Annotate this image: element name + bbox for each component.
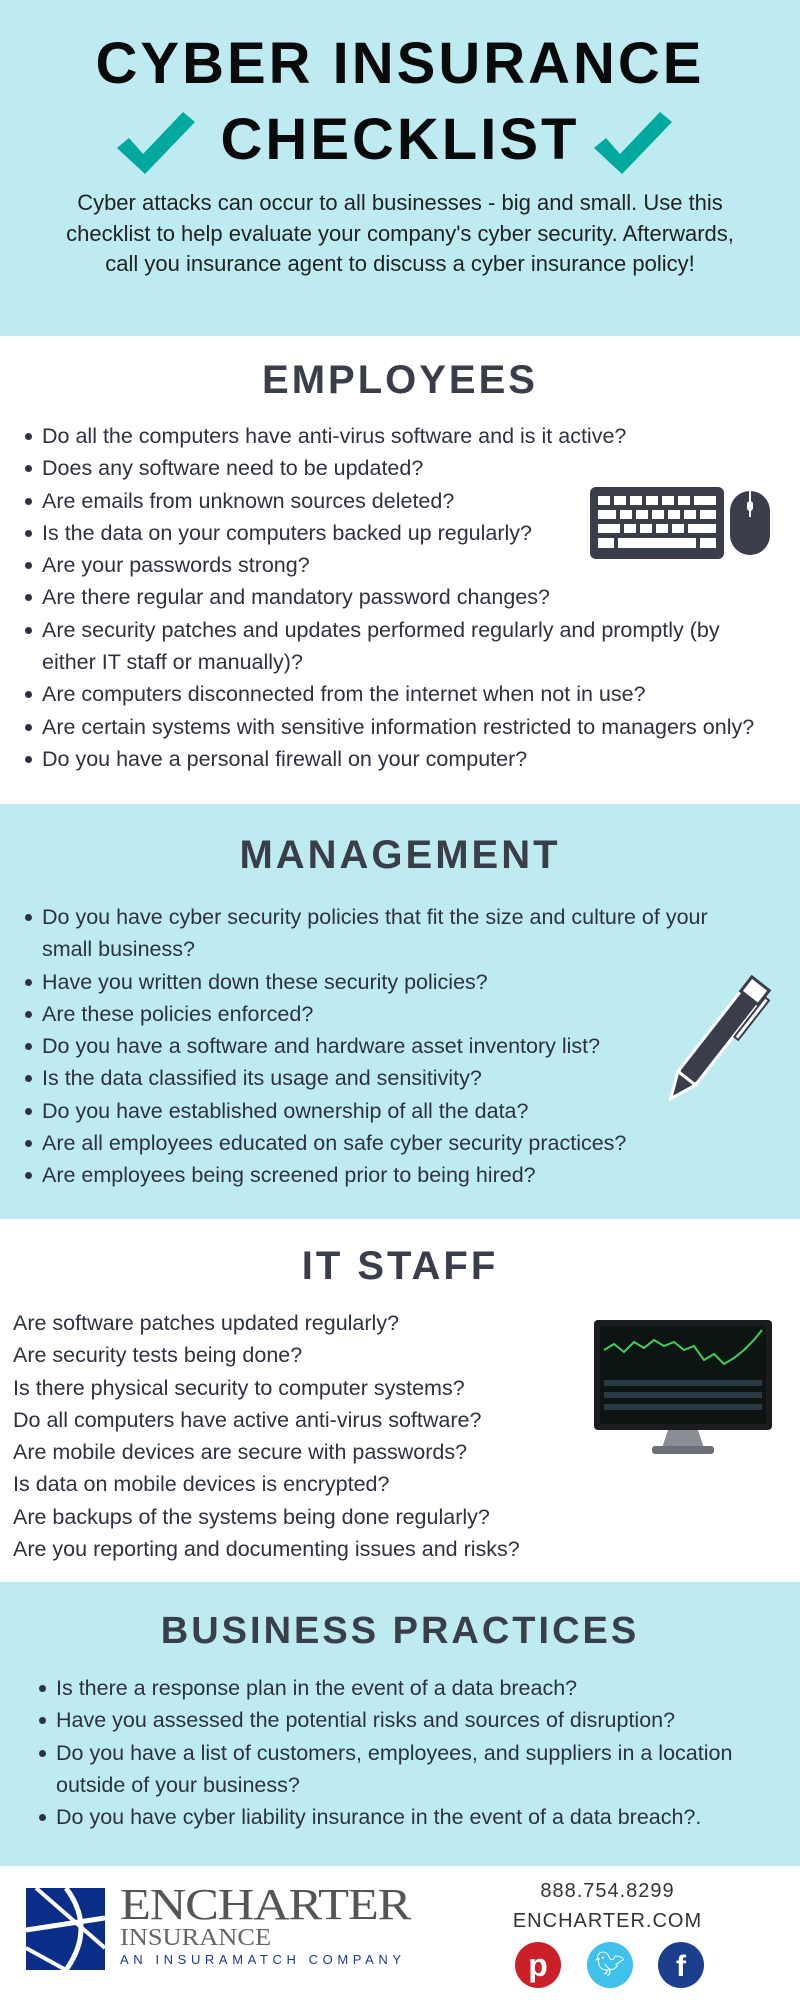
list: employees: Are your passwords strong? (42, 553, 310, 577)
list: management: Do you have established ownership of all the data? (42, 1099, 528, 1123)
list: management: Do you have cyber security policies that fit the size and culture of your (42, 905, 708, 929)
panel: employees (25, 358, 770, 771)
icon: keyboard and mouse (590, 487, 770, 559)
logo text: ENCHARTER (120, 1880, 410, 1929)
list: business practices (39, 1676, 732, 1829)
icon: facebook (658, 1942, 704, 1988)
list: business practices: Have you assessed the potential risks and sources of disruption? (56, 1708, 675, 1732)
list: it staff: Are backups of the systems being done regularly? (13, 1505, 490, 1529)
list: employees: Do all the computers have anti-virus software and is it active? (42, 424, 626, 448)
list: business practices: Do you have a list of customers, employees, and suppliers in a location (56, 1741, 732, 1765)
list: it staff (13, 1311, 520, 1561)
list: employees (25, 424, 754, 771)
list: management: small business? (42, 937, 195, 961)
list: employees: Are there regular and mandatory password changes? (42, 585, 550, 609)
list: business practices: outside of your business? (56, 1773, 300, 1797)
list: it staff: Are software patches updated regularly? (13, 1311, 399, 1335)
heading: business practices: BUSINESS PRACTICES (161, 1610, 639, 1652)
list: employees: either IT staff or manually)? (42, 650, 303, 674)
list: it staff: Are security tests being done? (13, 1343, 302, 1367)
logo: AN INSURAMATCH COMPANY (120, 1952, 406, 1967)
list: business practices: Do you have cyber liability insurance in the event of a data breach?. (56, 1805, 701, 1829)
list: employees: Does any software need to be updated? (42, 456, 423, 480)
title line 2: CHECKLIST (221, 107, 579, 172)
icon: pen (668, 974, 772, 1102)
contact info: 888.754.8299 (540, 1880, 675, 1902)
logo (26, 1880, 412, 1970)
list: employees: Are computers disconnected from the internet when not in use? (42, 682, 646, 706)
heading: employees: EMPLOYEES (262, 358, 538, 402)
intro text (66, 190, 734, 276)
icon: left check (117, 112, 195, 174)
heading: management: MANAGEMENT (239, 833, 561, 877)
heading: it staff: IT STAFF (302, 1244, 498, 1288)
list: management: Do you have a software and hardware asset inventory list? (42, 1034, 600, 1058)
list: management: Are all employees educated on safe cyber security practices? (42, 1131, 626, 1155)
list: employees: Are security patches and updates performed regularly and promptly (by (42, 618, 720, 642)
intro text: checklist to help evaluate your company's cyber security. Afterwards, (66, 221, 734, 246)
contact info: ENCHARTER.COM (513, 1910, 702, 1932)
panel: it staff (13, 1244, 772, 1561)
header panel (0, 0, 800, 336)
list: employees: Is the data on your computers backed up regularly? (42, 521, 532, 545)
icon: facebook: f (676, 1950, 686, 1983)
footer (26, 1880, 704, 1988)
list: management: Are employees being screened prior to being hired? (42, 1163, 536, 1187)
list: employees: Do you have a personal firewall on your computer? (42, 747, 527, 771)
icon: pinterest (515, 1942, 561, 1988)
panel: management (0, 804, 800, 1219)
list: employees: Are certain systems with sensitive information restricted to managers only? (42, 715, 754, 739)
list: management: Is the data classified its usage and sensitivity? (42, 1066, 482, 1090)
contact info (513, 1880, 702, 1932)
list: business practices: Is there a response plan in the event of a data breach? (56, 1676, 577, 1700)
intro text: Cyber attacks can occur to all businesses - big and small. Use this (77, 190, 723, 215)
intro text: call you insurance agent to discuss a cyber insurance policy! (105, 251, 695, 276)
icon: twitter (587, 1942, 633, 1988)
logo: INSURANCE (120, 1925, 271, 1951)
list: it staff: Is data on mobile devices is encrypted? (13, 1472, 389, 1496)
panel: business practices (0, 1582, 800, 1866)
icon: logo mark (26, 1888, 105, 1970)
list: employees: Are emails from unknown sources deleted? (42, 489, 454, 513)
list: management (25, 905, 708, 1187)
list: management: Have you written down these security policies? (42, 970, 488, 994)
list: it staff: Are mobile devices are secure with passwords? (13, 1440, 467, 1464)
list: it staff: Do all computers have active anti-virus software? (13, 1408, 481, 1432)
icon: pinterest: p (528, 1947, 548, 1983)
list: management: Are these policies enforced? (42, 1002, 313, 1026)
list: it staff: Is there physical security to computer systems? (13, 1376, 465, 1400)
title: CYBER INSURANCE (96, 31, 704, 96)
icon: right check (594, 112, 672, 174)
icon: twitter: 🐦︎ (595, 1951, 625, 1978)
list: it staff: Are you reporting and documenting issues and risks? (13, 1537, 520, 1561)
icon: monitor (594, 1320, 772, 1454)
